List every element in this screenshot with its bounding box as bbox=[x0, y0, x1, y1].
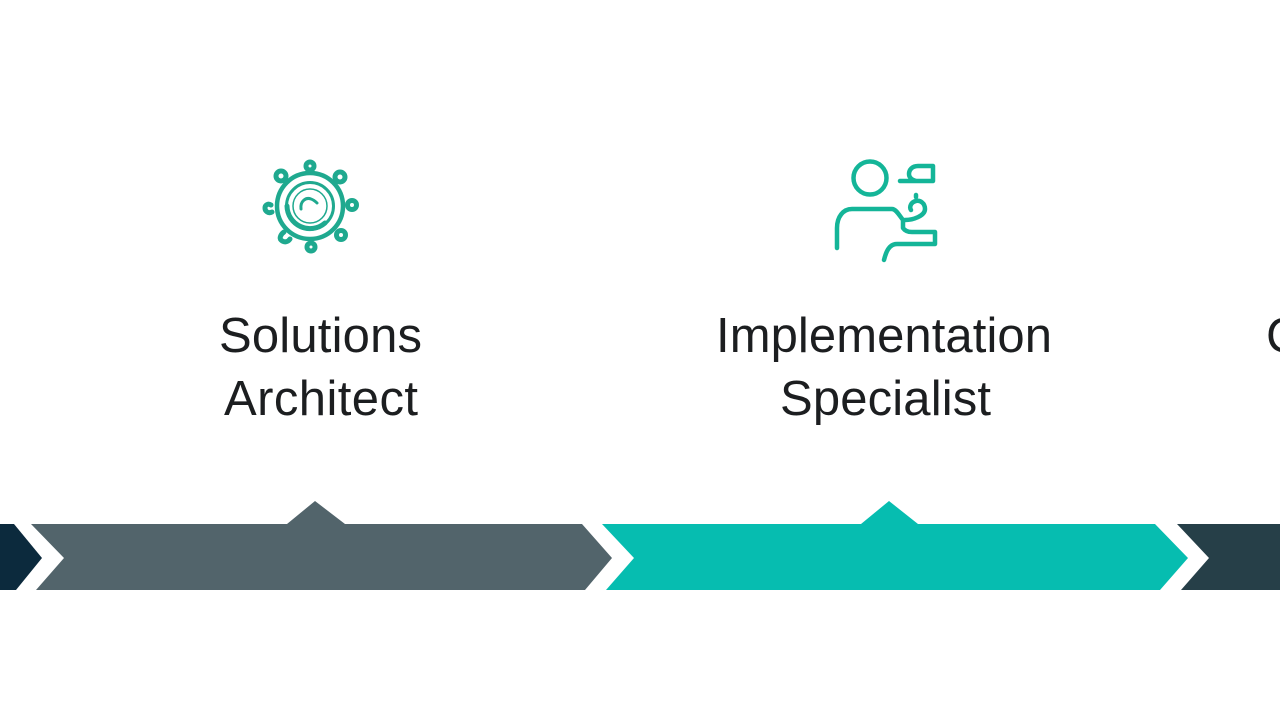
arrow: solutions architect slate bbox=[31, 501, 612, 590]
title: Solutions Architect: Architect bbox=[224, 372, 418, 426]
title: Implementation Specialist bbox=[716, 309, 1052, 426]
arrow: previous stage navy bbox=[0, 524, 42, 590]
title: Solutions Architect: Solutions bbox=[219, 309, 422, 363]
title: Implementation Specialist: Specialist bbox=[780, 372, 991, 426]
arrow: implementation specialist teal bbox=[602, 501, 1188, 590]
icon: gear with spiral bbox=[265, 162, 356, 251]
arrow: next stage dark teal bbox=[1177, 524, 1280, 590]
icon: person with gear marks bbox=[837, 162, 935, 260]
title: Solutions Architect bbox=[219, 309, 422, 426]
title: Implementation Specialist: Implementation bbox=[716, 309, 1052, 363]
